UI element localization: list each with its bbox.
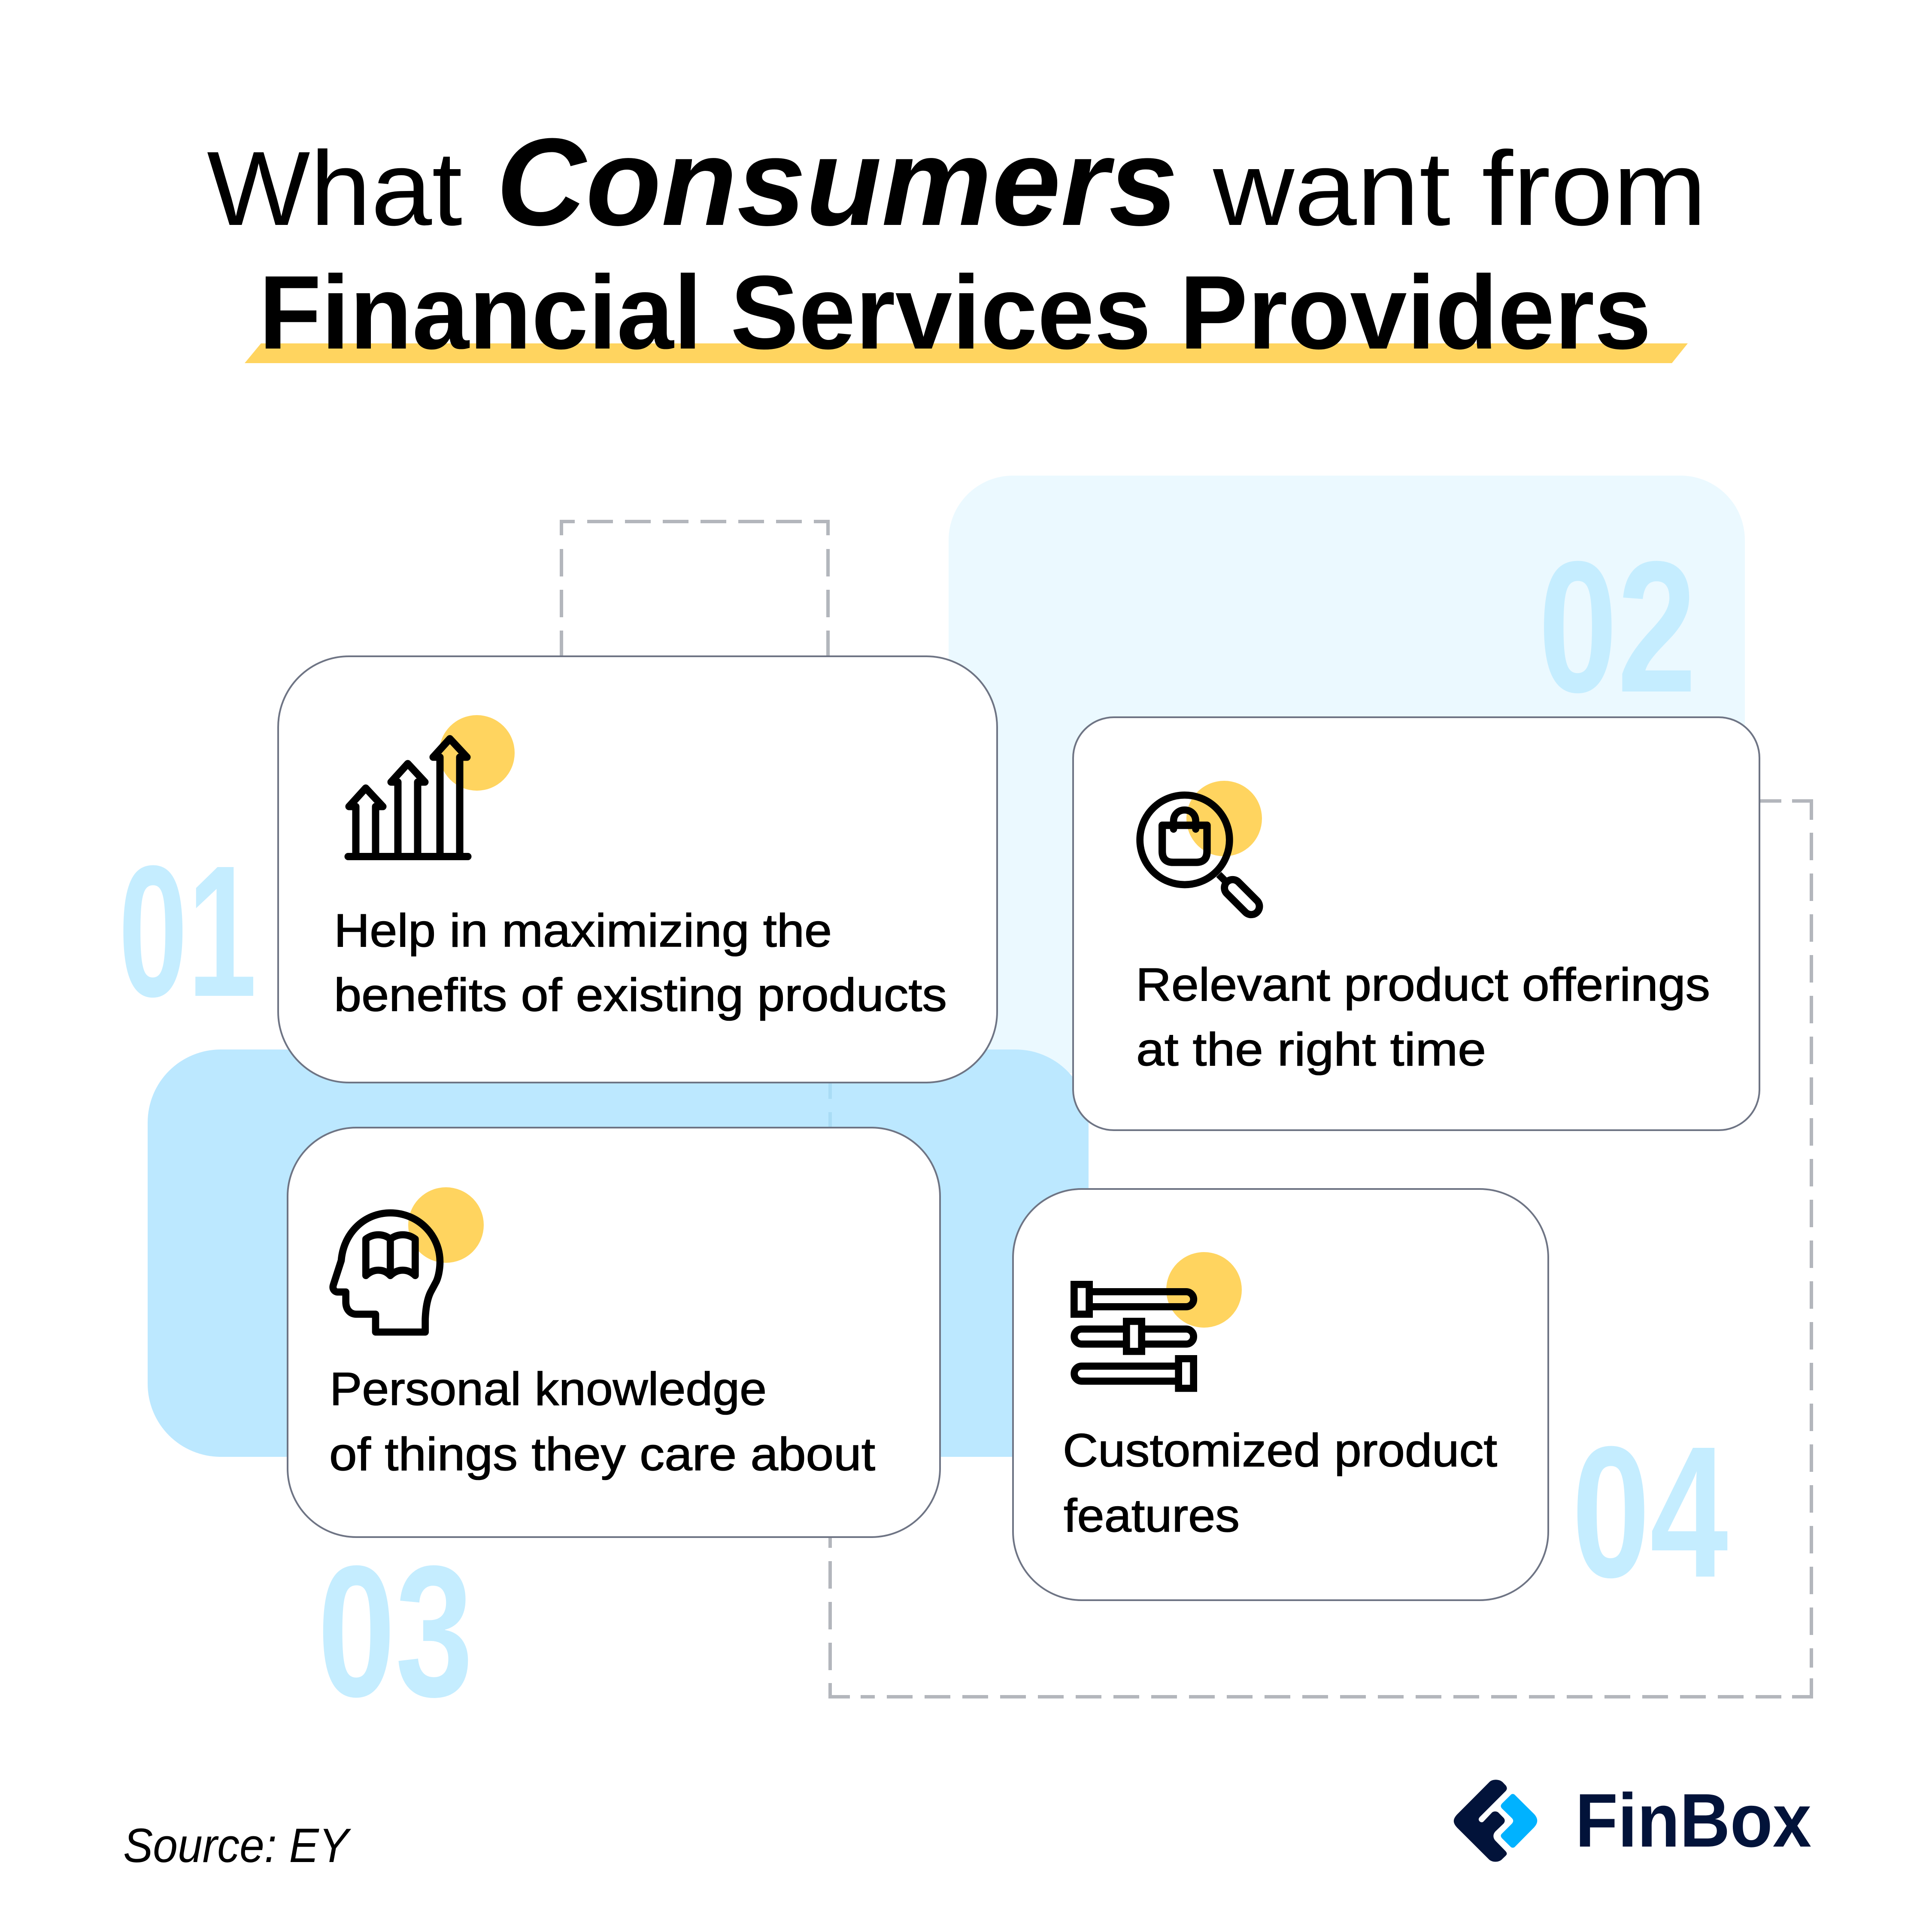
dashed frame: right [830,801,1811,1697]
card 4 text [1063,1424,1497,1542]
logo: FinBox [1454,1778,1811,1863]
card 3 text [329,1363,875,1480]
source note: Source: EY [123,1819,352,1872]
card 4 text: features [1064,1489,1240,1542]
card 2 text: at the right time [1136,1023,1486,1076]
panel: card 1 [278,656,997,1083]
dashed frame: top [561,522,828,661]
card 2 text [1136,958,1710,1076]
title line 1: Consumers [496,112,1178,252]
title [207,112,1707,371]
icon: magnifier with shopping bag [1140,781,1262,907]
icon: rising arrows [348,715,515,857]
card 3 text: of things they care about [329,1428,875,1480]
card 2 text: Relevant product offerings [1136,958,1710,1011]
icon: FinBox mark [1454,1780,1537,1862]
title underline [245,343,1688,363]
panel: light blue background [949,476,1745,1073]
card 1 text [334,904,947,1021]
card 1 text: benefits of existing products [334,969,947,1021]
card 1 text: Help in maximizing the [334,904,832,957]
number 01: 01 [118,827,257,1036]
panel: card 2 [1073,717,1759,1130]
title line 1 [207,112,1707,252]
icon: sliders [1074,1252,1242,1388]
icon: head with book [333,1187,484,1332]
number 02: 02 [1538,522,1696,731]
card 4 text: Customized product [1063,1424,1497,1477]
number 04: 04 [1572,1407,1729,1617]
title line 1: want from [1213,130,1707,248]
panel: card 3 [288,1128,940,1537]
title line 1: What [207,130,462,248]
title line 2: Financial Services Providers [259,254,1651,371]
card 3 text: Personal knowledge [330,1363,767,1415]
panel: card 4 [1013,1189,1548,1600]
logo wordmark: FinBox [1575,1778,1811,1863]
panel: blue background [148,1049,1089,1457]
number 03: 03 [318,1527,473,1736]
